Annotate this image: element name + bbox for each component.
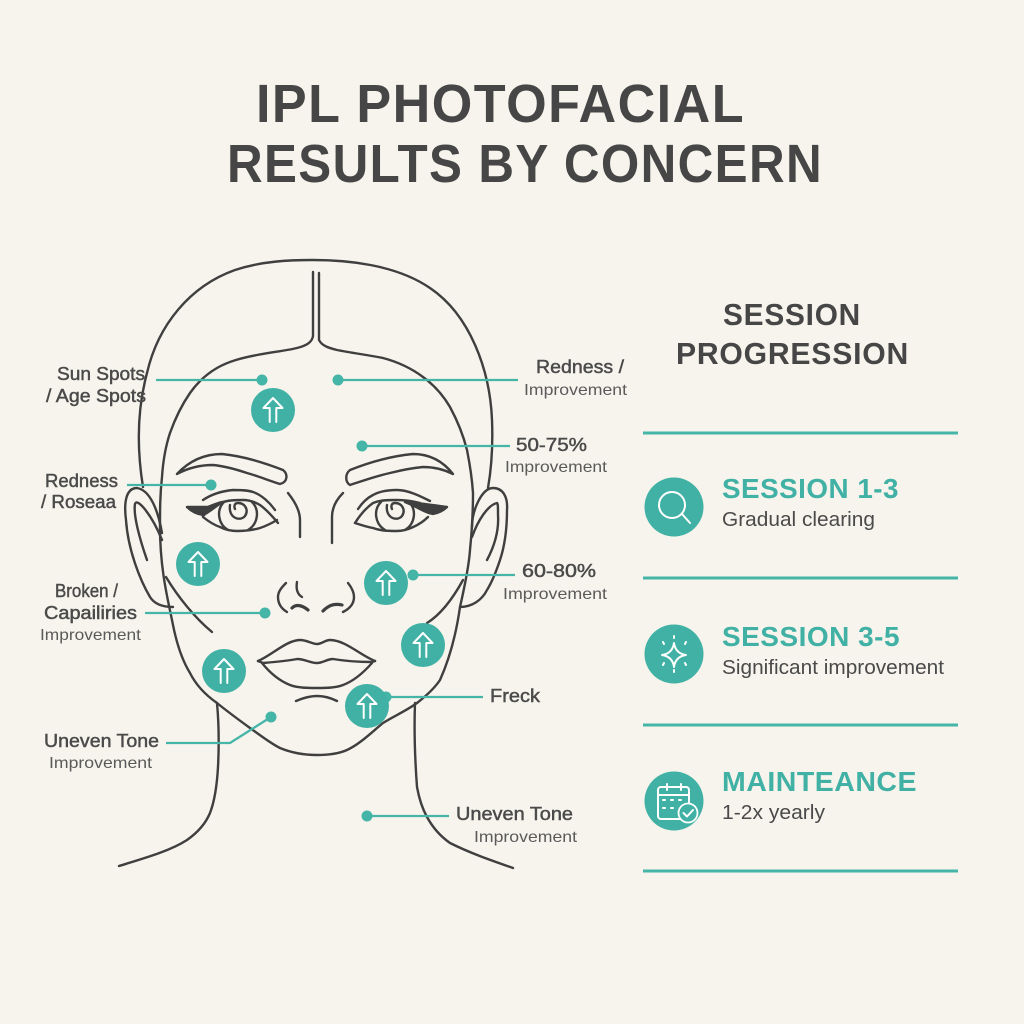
- callout: broken capillaries: Improvement: [40, 627, 142, 644]
- badge: right cheek arrow: [364, 561, 408, 605]
- heading: session progression: [676, 297, 909, 371]
- callout: freck: [380, 686, 541, 706]
- icon: calendar: [644, 772, 704, 830]
- head outline: [139, 260, 492, 488]
- callout: redness rosacea: / Roseaa: [41, 492, 117, 512]
- panel: maintenance: MAINTEANCE: [722, 766, 917, 797]
- callout: uneven tone neck: Uneven Tone: [456, 804, 573, 824]
- badge: left jaw arrow: [202, 649, 246, 693]
- callout: sun spots: [46, 364, 268, 406]
- panel: session 1-3: Gradual clearing: [722, 509, 875, 531]
- callout: uneven tone chin: Improvement: [49, 755, 153, 772]
- panel: session 3-5: SESSION 3-5: [722, 621, 900, 652]
- icon: sparkle: [644, 624, 704, 684]
- callout: broken capillaries: [40, 581, 270, 644]
- callout: 60-80%: [408, 561, 608, 603]
- lips: [258, 640, 375, 661]
- panel: maintenance: [644, 766, 917, 830]
- callout: broken capillaries: Capailiries: [44, 603, 137, 623]
- callout: 60-80%: Improvement: [503, 586, 608, 603]
- left eyebrow: [177, 454, 286, 484]
- panel: session 1-3: SESSION 1-3: [722, 473, 899, 504]
- right eyebrow: [346, 454, 453, 485]
- callout: redness forehead: Redness /: [536, 357, 624, 377]
- heading: session progression: SESSION: [723, 297, 861, 332]
- badge: forehead arrow: [251, 388, 295, 432]
- left ear: [125, 488, 173, 607]
- callout: redness rosacea: [41, 471, 216, 512]
- right jaw crease: [427, 580, 463, 623]
- callout: uneven tone chin: Uneven Tone: [44, 731, 159, 751]
- left jaw crease: [166, 577, 212, 632]
- callout: sun spots: / Age Spots: [46, 386, 146, 406]
- neck left: [119, 703, 219, 866]
- panel: session 1-3: [644, 473, 899, 536]
- callout: 50-75%: 50-75%: [516, 435, 587, 455]
- nose bridge: [288, 493, 300, 537]
- callout: 50-75%: Improvement: [505, 459, 608, 476]
- panel: maintenance: 1-2x yearly: [722, 802, 825, 824]
- title: RESULTS BY CONCERN: [227, 134, 823, 194]
- neck right: [415, 703, 513, 868]
- left eye: [203, 490, 275, 510]
- title: IPL PHOTOFACIAL: [256, 74, 745, 134]
- callout: redness forehead: Improvement: [524, 382, 628, 399]
- right ear: [460, 488, 507, 607]
- callout: 50-75%: [356, 435, 608, 476]
- callout: uneven tone neck: [362, 804, 578, 846]
- chin crease: [296, 696, 337, 701]
- badge: right jaw arrow: [401, 623, 445, 667]
- callout: freck: Freck: [490, 686, 541, 706]
- callout: uneven tone neck: Improvement: [474, 829, 578, 846]
- callout: 60-80%: 60-80%: [522, 561, 596, 581]
- callout: sun spots: Sun Spots: [57, 364, 145, 384]
- callout: broken capillaries: Broken /: [55, 581, 118, 601]
- panel: session 3-5: Significant improvement: [722, 657, 944, 679]
- right eye: [358, 490, 430, 509]
- divider lines: [643, 433, 958, 871]
- panel: session 3-5: [644, 621, 944, 684]
- callout: redness rosacea: Redness: [45, 471, 118, 491]
- callout: redness forehead: [332, 357, 628, 399]
- hair parting and face outline: [160, 272, 473, 755]
- heading: session progression: PROGRESSION: [676, 336, 909, 371]
- face line drawing: [119, 260, 513, 868]
- badge: chin arrow: [345, 684, 389, 728]
- icon: magnifier: [644, 478, 704, 536]
- nose: [278, 583, 287, 612]
- callout: uneven tone chin: [44, 712, 276, 772]
- badge: left cheek arrow: [176, 542, 220, 586]
- title: [227, 74, 823, 194]
